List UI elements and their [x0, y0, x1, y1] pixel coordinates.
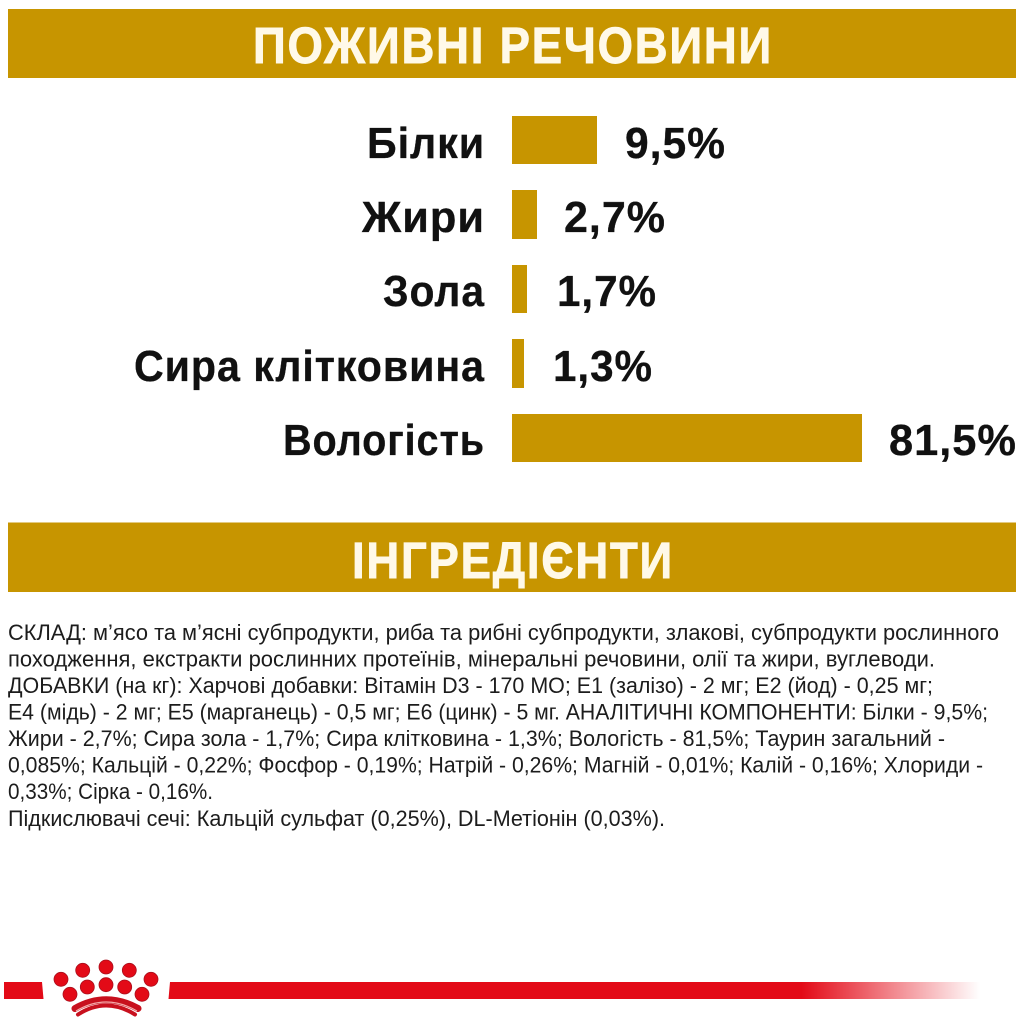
row: ash: [383, 265, 657, 316]
row: fat: Жири: [361, 193, 485, 242]
row: moisture: 81,5%: [889, 416, 1017, 465]
row: protein: Білки: [367, 119, 485, 168]
row: moisture: [283, 414, 1017, 465]
red line left: [4, 982, 44, 999]
row: ash: Зола: [383, 267, 485, 316]
text block: ingredients: ДОБАВКИ (на кг): Харчові добавки: Вітамін D3 - 170 МО; Е1 (залізо) - 2 мг; Е2 (йод) - 0,25 мг;: [8, 673, 933, 698]
text block: ingredients: Підкислювачі сечі: Кальцій сульфат (0,25%), DL-Метіонін (0,03%).: [8, 806, 665, 831]
row: ash: 1,7%: [557, 267, 657, 316]
panel: nutrients heading: [8, 9, 1016, 78]
row: protein: [367, 116, 726, 168]
row: crude fibre: [134, 339, 653, 391]
text block: ingredients: [8, 620, 999, 831]
row: fat: [361, 190, 666, 242]
row: crude fibre: 1,3%: [553, 342, 653, 391]
bar chart: nutrients: [134, 116, 1017, 465]
footer: brand line and crown logo: [4, 960, 980, 1014]
row: moisture: Вологість: [283, 416, 485, 465]
panel: nutrients heading: ПОЖИВНІ РЕЧОВИНИ: [253, 17, 773, 74]
row: crude fibre: Сира клітковина: [134, 342, 485, 391]
red line right: [168, 982, 980, 999]
row: protein: 9,5%: [625, 119, 726, 168]
icon: crown logo: [54, 960, 158, 1014]
text block: ingredients: Жири - 2,7%; Сира зола - 1,7%; Сира клітковина - 1,3%; Вологість - 81,5%; Таурин загальний -: [8, 726, 945, 751]
row: fat: 2,7%: [564, 193, 666, 242]
panel: ingredients heading: [8, 522, 1016, 592]
text block: ingredients: СКЛАД: м’ясо та м’ясні субпродукти, риба та рибні субпродукти, злакові, субпродукти рослинного: [8, 620, 999, 645]
text block: ingredients: походження, екстракти рослинних протеїнів, мінеральні речовини, олії та жири, вуглеводи.: [8, 646, 935, 672]
panel: ingredients heading: ІНГРЕДІЄНТИ: [352, 532, 674, 589]
text block: ingredients: Е4 (мідь) - 2 мг; Е5 (марганець) - 0,5 мг; Е6 (цинк) - 5 мг. АНАЛІТИЧНІ КОМПОНЕНТИ: Білки - 9,5%;: [8, 700, 988, 724]
text block: ingredients: 0,085%; Кальцій - 0,22%; Фосфор - 0,19%; Натрій - 0,26%; Магній - 0,01%; Калій - 0,16%; Хлориди -: [8, 752, 983, 778]
text block: ingredients: 0,33%; Сірка - 0,16%.: [8, 779, 213, 804]
